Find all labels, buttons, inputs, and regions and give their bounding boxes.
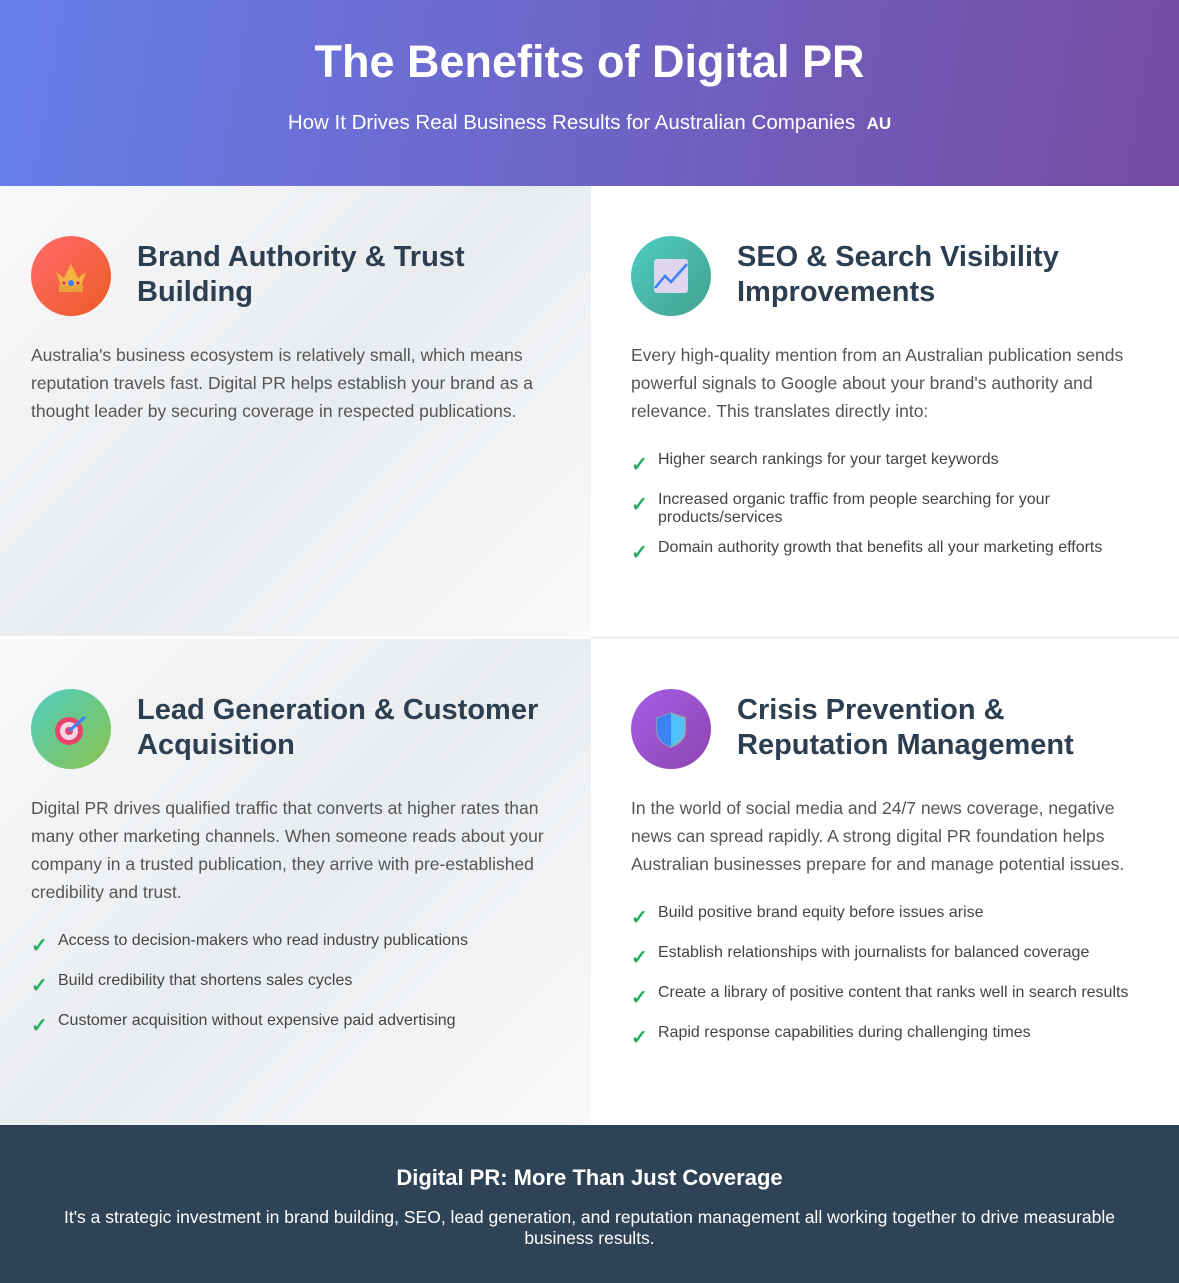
panel: lead generation [0, 639, 591, 1125]
checklist: ✓ [631, 907, 648, 929]
footer [0, 1125, 1179, 1283]
checklist: ✓ [631, 542, 648, 564]
checklist: ✓ [631, 987, 648, 1009]
footer text: It's a strategic investment in brand building, SEO, lead generation, and reputation management all working together to drive measurable business results. [64, 1207, 1115, 1248]
panel: brand authority [0, 186, 591, 636]
panel: crisis [631, 689, 1128, 1049]
panel: SEO [631, 236, 1123, 564]
header [0, 0, 1179, 186]
text: In the world of social media and 24/7 news coverage, negative news can spread rapidly. A strong digital PR foundation helps Australian businesses prepare for and manage potential issues. [631, 798, 1124, 874]
footer heading: Digital PR: More Than Just Coverage [396, 1165, 783, 1190]
checklist: Higher search rankings for your target keywords [658, 451, 999, 468]
title: The Benefits of Digital PR [314, 36, 865, 87]
checklist: Domain authority growth that benefits all your marketing efforts [658, 539, 1102, 556]
checklist: ✓ [31, 935, 48, 957]
checklist: Customer acquisition without expensive paid advertising [58, 1012, 456, 1029]
checklist: Build credibility that shortens sales cycles [58, 972, 352, 989]
checklist: ✓ [31, 975, 48, 997]
checklist: Increased organic traffic from people searching for your products/services [658, 491, 1050, 526]
icon: crown [31, 236, 111, 316]
checklist [31, 932, 468, 1037]
heading: Lead Generation & Customer Acquisition [137, 694, 538, 761]
checklist: Build positive brand equity before issues arise [658, 904, 984, 921]
heading: Crisis Prevention & Reputation Management [737, 694, 1074, 761]
checklist [631, 451, 1102, 564]
checklist: Access to decision-makers who read industry publications [58, 932, 468, 949]
text: Every high-quality mention from an Australian publication sends powerful signals to Google about your brand's authority and relevance. This translates directly into: [631, 345, 1123, 421]
checklist: ✓ [631, 1027, 648, 1049]
text: Australia's business ecosystem is relatively small, which means reputation travels fast. Digital PR helps establish your brand as a thought leader by securing coverage in respected publications. [31, 345, 533, 421]
checklist: ✓ [631, 947, 648, 969]
checklist [631, 904, 1128, 1049]
checklist: ✓ [631, 454, 648, 476]
checklist: Establish relationships with journalists for balanced coverage [658, 944, 1089, 961]
heading: SEO & Search Visibility Improvements [737, 241, 1059, 308]
checklist: ✓ [31, 1015, 48, 1037]
checklist: Create a library of positive content that ranks well in search results [658, 984, 1128, 1001]
checklist: ✓ [631, 494, 648, 516]
heading: Brand Authority & Trust Building [137, 241, 465, 308]
checklist: Rapid response capabilities during challenging times [658, 1024, 1031, 1041]
text: Digital PR drives qualified traffic that converts at higher rates than many other marketing channels. When someone reads about your company in a trusted publication, they arrive with pre-established credibility and trust. [31, 798, 544, 902]
icon: shield [631, 689, 711, 769]
icon: chart [631, 236, 711, 316]
subtitle: How It Drives Real Business Results for Australian Companies AU [288, 111, 891, 134]
icon: target [31, 689, 111, 769]
